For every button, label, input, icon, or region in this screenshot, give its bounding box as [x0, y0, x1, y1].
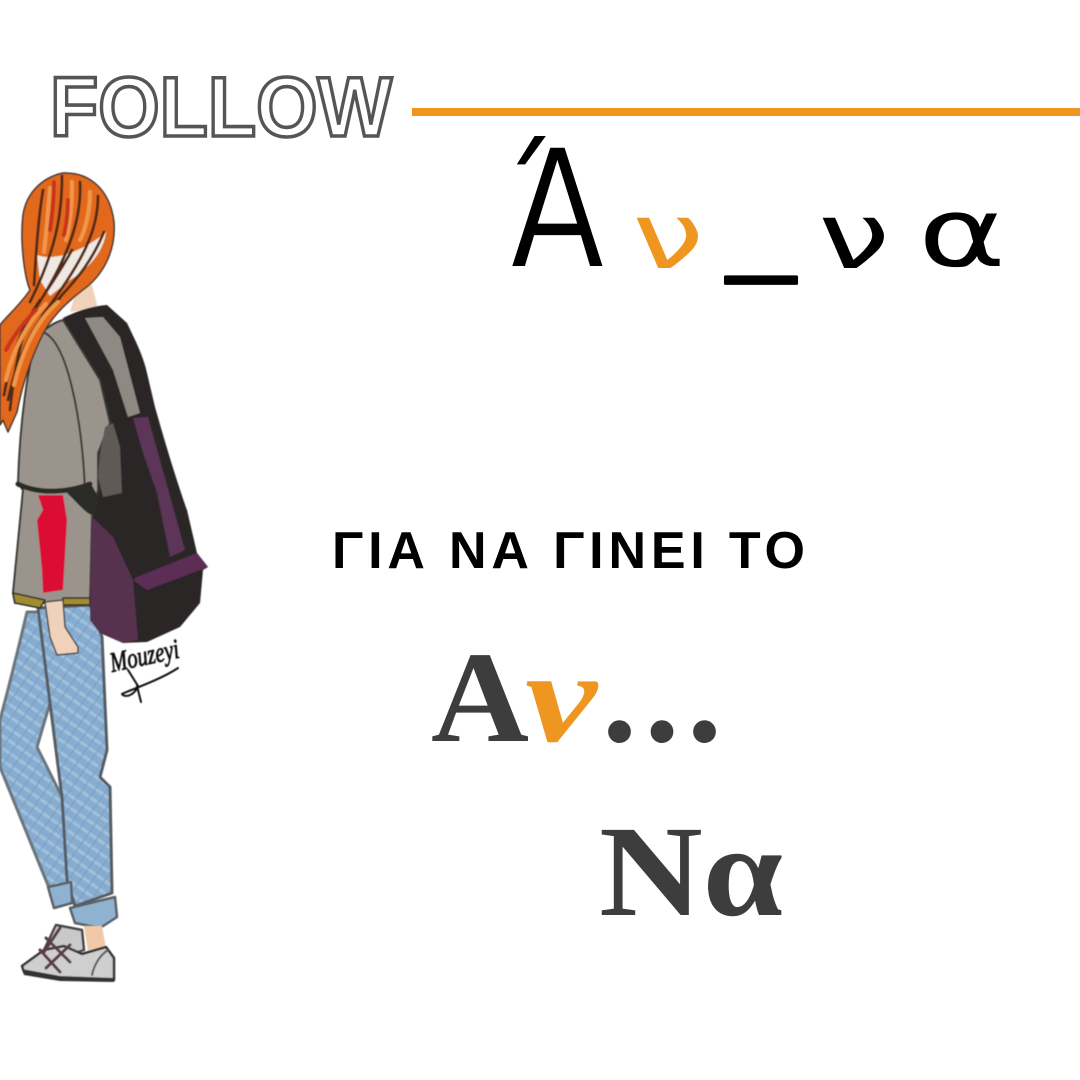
handwritten name: α — [918, 177, 1006, 289]
grey upper panel of backpack — [85, 317, 140, 417]
neck — [70, 285, 98, 312]
orange rule — [412, 108, 1080, 116]
handwritten name: ν — [818, 183, 890, 290]
hair — [0, 173, 114, 432]
jacket body — [13, 320, 110, 603]
artist signature: Mouzeyi — [106, 634, 182, 679]
purple flap — [133, 553, 208, 590]
purple side panel — [90, 517, 138, 643]
dark grey pocket — [98, 423, 122, 497]
serif phrase: Αν...: Α — [431, 626, 529, 770]
purple stripe — [133, 417, 185, 557]
front leg jeans — [38, 605, 112, 906]
serif phrase: Αν... — [431, 617, 722, 772]
artist signature — [106, 634, 182, 702]
subheading: ΓΙΑ ΝΑ ΓΙΝΕΙ ΤΟ — [332, 522, 805, 580]
red shirt sleeve — [37, 495, 67, 593]
back leg jeans — [0, 612, 70, 890]
handwritten name: Ά — [510, 114, 606, 306]
arm strap — [67, 482, 100, 515]
handwritten name — [510, 114, 1006, 306]
hand — [45, 600, 78, 655]
shoes — [22, 925, 114, 982]
hair light strokes — [6, 182, 90, 385]
serif word: Να: Να — [599, 800, 783, 944]
handwritten name: _ — [726, 167, 796, 284]
sleeve seam — [45, 333, 85, 490]
jeans cuffs — [48, 882, 117, 928]
serif phrase: Αν...: ... — [602, 617, 722, 772]
handwritten name: ν — [632, 183, 704, 290]
yellow belt — [13, 593, 90, 608]
heading: FOLLOW outlined: FOLLOW — [50, 60, 393, 154]
red hair streaks — [6, 182, 68, 350]
serif phrase: Αν...: ν — [525, 626, 599, 770]
hair highlight — [37, 232, 106, 296]
illustration: girl seen from behind with backpack — [0, 173, 208, 982]
backpack silhouette — [63, 305, 208, 643]
hair strands — [4, 176, 104, 410]
sleeve hem — [18, 484, 90, 491]
